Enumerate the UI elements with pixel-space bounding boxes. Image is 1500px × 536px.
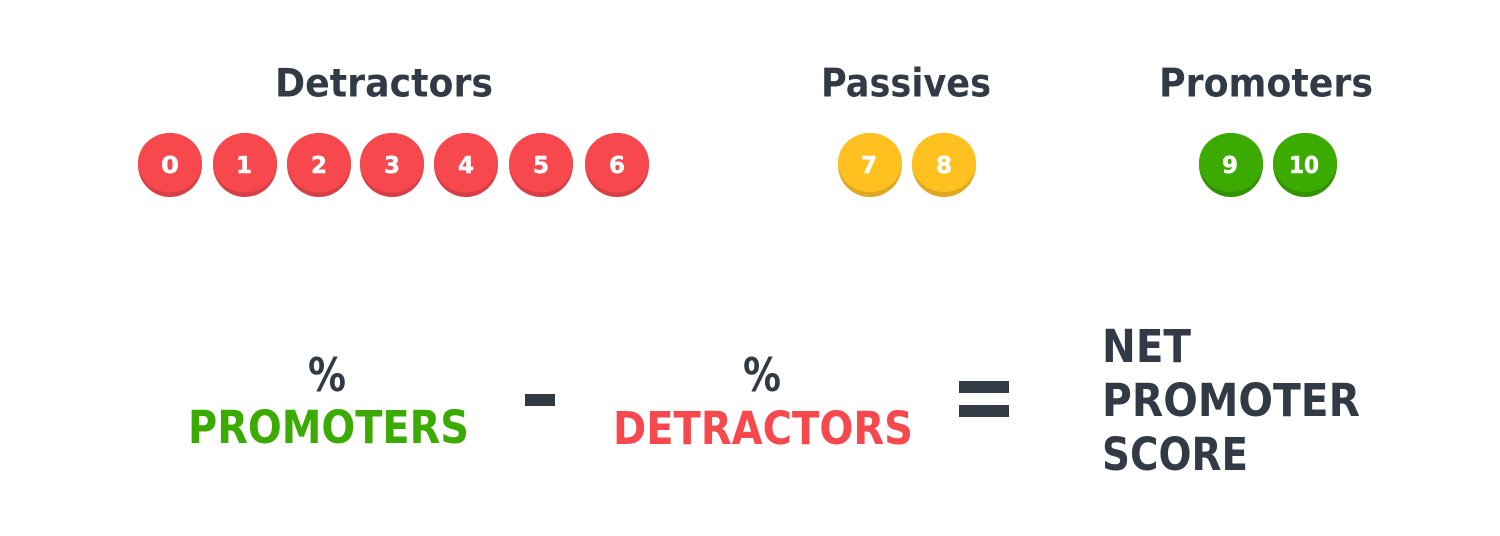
badge 1 xyxy=(213,133,277,197)
equals sign xyxy=(959,381,1009,417)
badge 7: 7 xyxy=(861,153,877,179)
result: net promoter score: NET xyxy=(1102,320,1191,373)
result: net promoter score: SCORE xyxy=(1102,428,1248,481)
label: detractors: DETRACTORS xyxy=(613,402,913,455)
label: promoters: PROMOTERS xyxy=(188,401,469,454)
result: net promoter score: PROMOTER xyxy=(1102,374,1360,427)
badge 8: 8 xyxy=(936,153,952,179)
badge 1: 1 xyxy=(236,153,252,179)
badge 6 xyxy=(585,133,649,197)
badge 0 xyxy=(138,133,202,197)
percent sign: % xyxy=(308,348,346,402)
result: net promoter score xyxy=(1102,320,1360,481)
formula term: percent promoters xyxy=(188,348,469,454)
badge 4: 4 xyxy=(458,153,474,179)
badge 2 xyxy=(287,133,351,197)
badge 2: 2 xyxy=(311,153,327,179)
promoter score badges 9-10 xyxy=(1199,133,1337,197)
badge 5 xyxy=(509,133,573,197)
badge 9: 9 xyxy=(1222,153,1238,179)
detractor score badges 0-6 xyxy=(138,133,649,197)
passive score badges 7-8 xyxy=(838,133,976,197)
formula term: percent detractors xyxy=(613,348,913,455)
heading: Promoters: Promoters xyxy=(1159,62,1373,106)
badge 0: 0 xyxy=(161,153,179,179)
minus sign xyxy=(525,394,555,406)
badge 6: 6 xyxy=(609,153,625,179)
heading: Passives: Passives xyxy=(821,62,991,106)
badge 5: 5 xyxy=(533,153,549,179)
badge 3 xyxy=(360,133,424,197)
percent sign: % xyxy=(743,348,781,402)
heading: Detractors: Detractors xyxy=(275,62,493,106)
badge 10: 10 xyxy=(1289,153,1319,179)
badge 3: 3 xyxy=(384,153,400,179)
badge 4 xyxy=(434,133,498,197)
